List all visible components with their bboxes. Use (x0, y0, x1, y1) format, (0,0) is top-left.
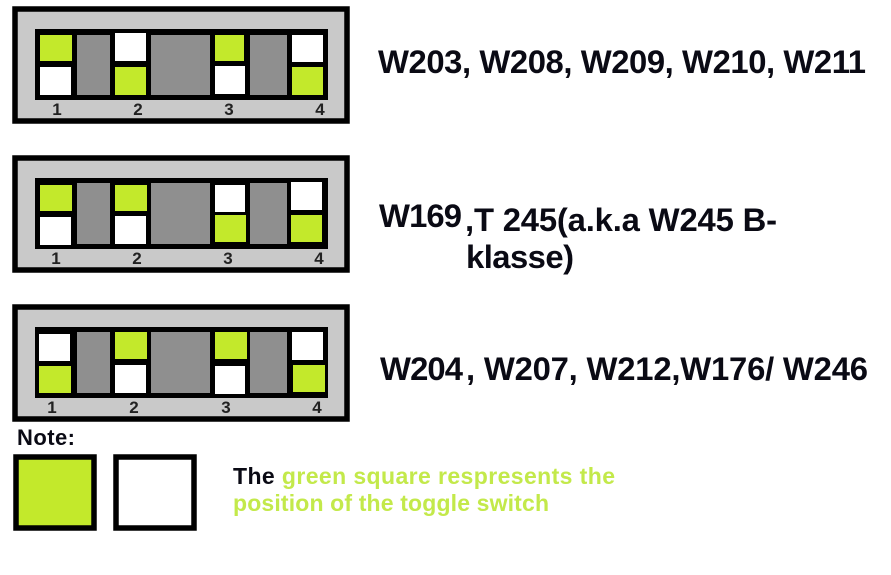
panel: switch diagram 1: 4 (315, 100, 325, 119)
legend: white square (116, 457, 194, 528)
panel: switch diagram 1: 3 (224, 100, 234, 119)
panel: switch diagram 3: 4 (312, 398, 322, 417)
legend explanation text (233, 463, 615, 516)
panel: switch diagram 1: 1 (52, 100, 62, 119)
note label: Note: (17, 425, 75, 450)
heading: models for diagram 3: , W207, W212,W176/ W246 (466, 350, 868, 387)
heading: models for diagram 2: klasse) (466, 238, 574, 275)
panel: switch diagram 3: 3 (221, 398, 231, 417)
heading: models for diagram 2: W169 (379, 197, 462, 234)
panel: switch diagram 3 (15, 307, 347, 419)
panel: switch diagram 1 (15, 9, 347, 121)
heading: models for diagram 2: ,T 245(a.k.a W245 B- (465, 201, 777, 238)
legend explanation text: position of the toggle switch (233, 490, 549, 516)
panel: switch diagram 3: 2 (129, 398, 139, 417)
legend: green square (16, 457, 94, 528)
legend explanation text: The green square respresents the (233, 463, 615, 489)
panel: switch diagram 2 (15, 158, 347, 270)
panel: switch diagram 3: 1 (47, 398, 57, 417)
panel: switch diagram 2: 2 (132, 249, 142, 268)
panel: switch diagram 2: 3 (223, 249, 233, 268)
heading: models for diagram 1: W203, W208, W209, W210, W211 (378, 43, 866, 80)
panel: switch diagram 1: 2 (133, 100, 143, 119)
panel: switch diagram 2: 1 (51, 249, 61, 268)
panel: switch diagram 2: 4 (314, 249, 324, 268)
heading: models for diagram 2 (379, 197, 777, 275)
heading: models for diagram 3: W204 (380, 350, 464, 387)
